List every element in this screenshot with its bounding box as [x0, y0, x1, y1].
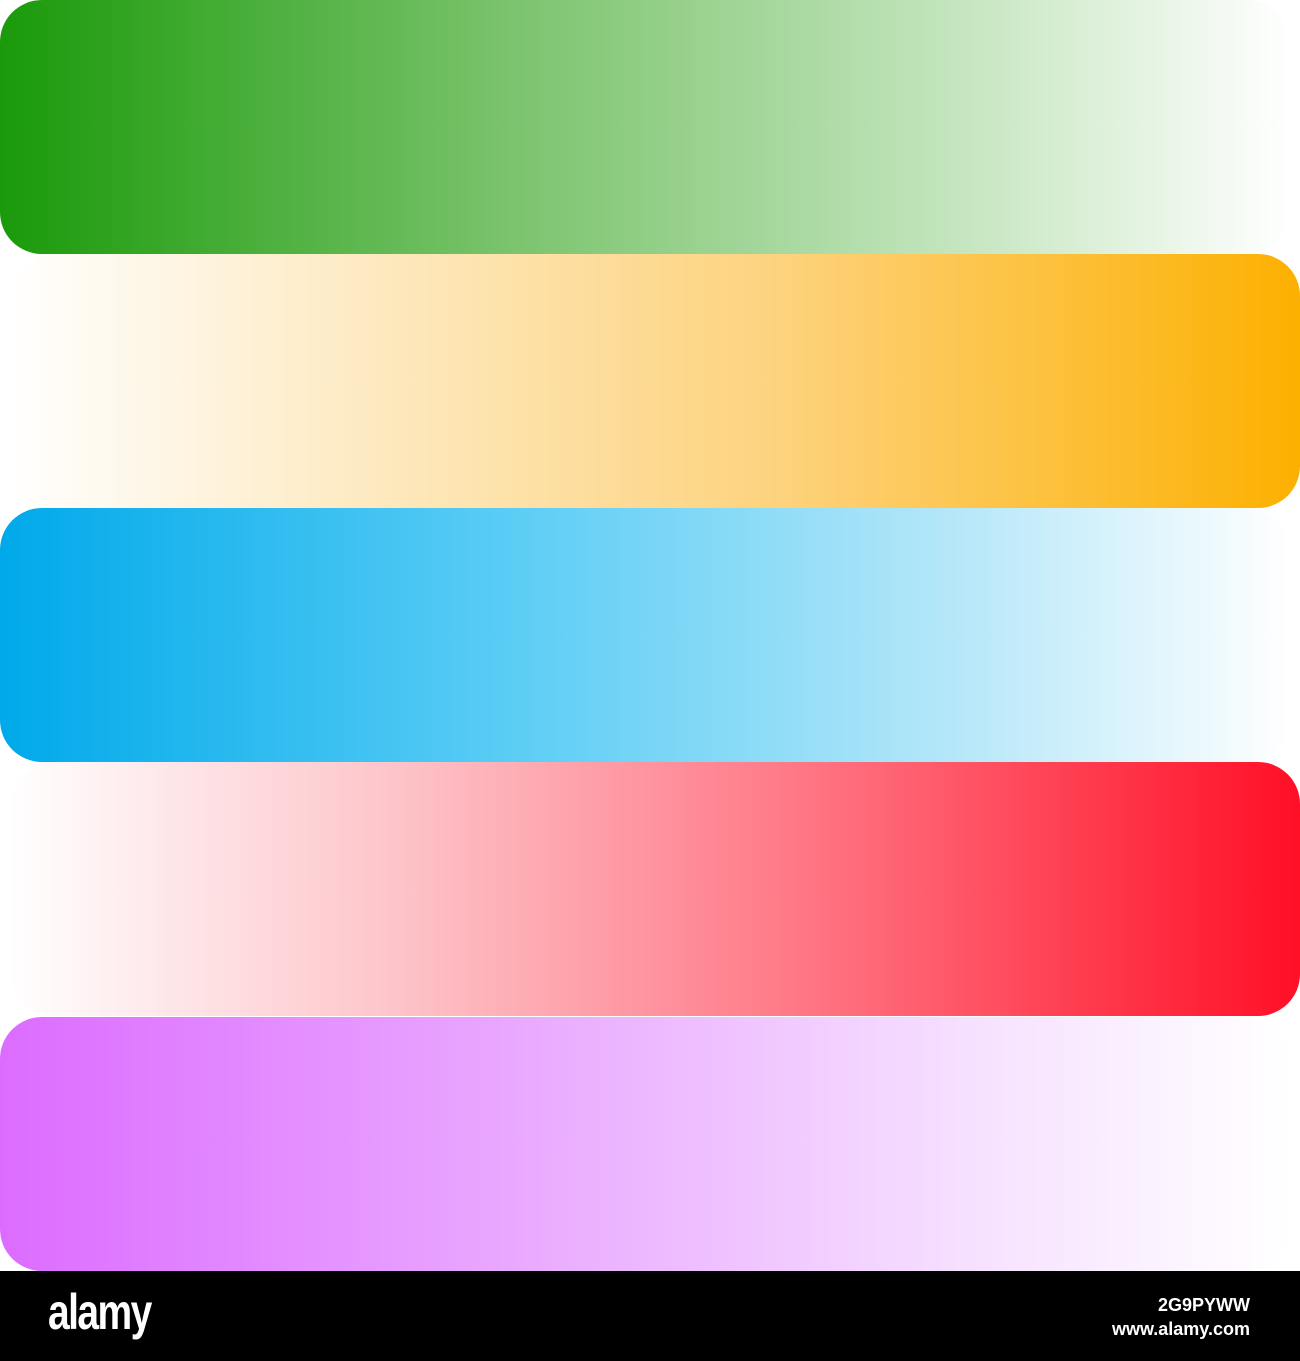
logo text: alamy [48, 1284, 151, 1340]
bar: red [10, 762, 1300, 1016]
footer [0, 1271, 1300, 1361]
bar: orange [10, 254, 1300, 508]
bar: blue [0, 508, 1290, 762]
image code [1112, 1295, 1250, 1339]
image code: 2G9PYWW [1158, 1295, 1250, 1315]
bar: green [0, 0, 1290, 254]
bar: purple [0, 1017, 1290, 1271]
image code: www.alamy.com [1112, 1319, 1250, 1339]
